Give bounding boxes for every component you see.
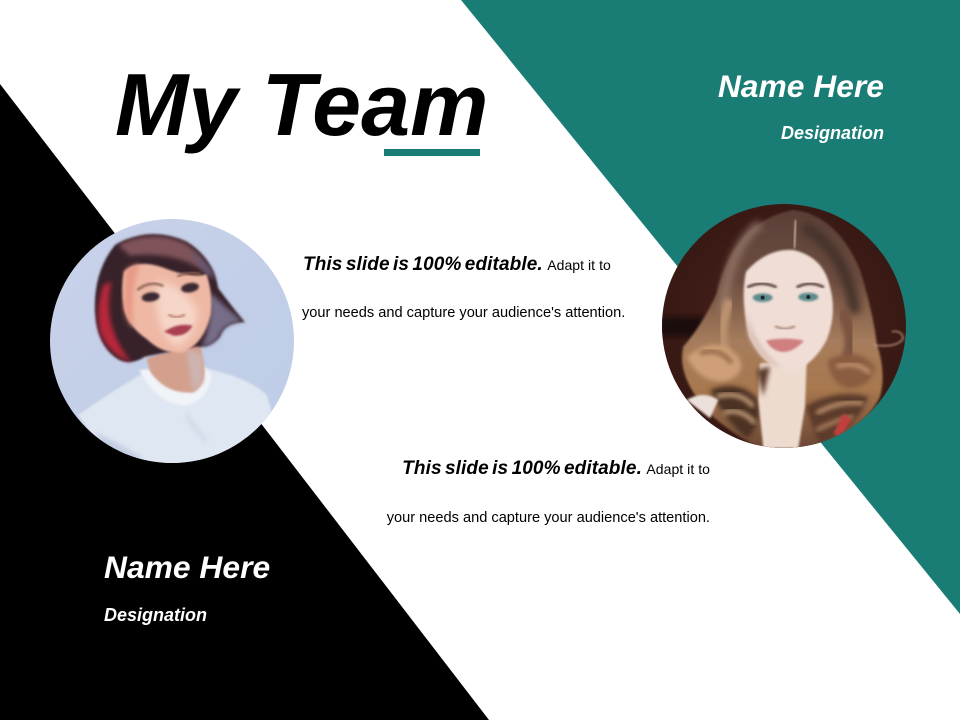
nose shadow — [775, 326, 795, 329]
red dress — [833, 413, 852, 437]
hair parting — [794, 220, 796, 248]
curls left — [687, 345, 741, 382]
lips — [164, 325, 193, 336]
second message lead line: This slide is 100% editable. Adapt it to — [402, 458, 710, 479]
hair back — [95, 234, 245, 362]
neck — [147, 342, 204, 393]
team member: top right — [718, 68, 884, 143]
name: Name Here — [718, 68, 884, 104]
first message lead line: This slide is 100% editable. Adapt it to — [303, 254, 611, 275]
second message second line: your needs and capture your audience's attention. — [387, 510, 710, 526]
face — [122, 264, 211, 353]
nose shadow — [168, 314, 185, 317]
face — [744, 250, 833, 371]
side strands — [723, 223, 760, 313]
designation: Designation — [781, 123, 884, 143]
portrait: woman with short hair — [50, 219, 294, 463]
title underline accent — [384, 149, 480, 156]
grey hair side — [202, 292, 243, 347]
hair mass — [682, 210, 883, 448]
top hair highlight — [118, 236, 215, 280]
eyes — [753, 293, 773, 302]
red hair highlight — [98, 282, 132, 362]
first message second line: your needs and capture your audience's attention. — [302, 305, 625, 321]
shirt — [78, 368, 272, 465]
eyes — [141, 291, 160, 303]
name: Name Here — [104, 549, 270, 585]
curls right — [828, 354, 875, 388]
text block: first message — [302, 254, 625, 321]
lips — [766, 339, 804, 352]
brows — [747, 284, 777, 287]
shoulder and chest — [687, 395, 718, 418]
text block: second message — [386, 458, 710, 526]
designation: Designation — [104, 605, 207, 625]
portrait: woman with long wavy hair — [662, 204, 906, 448]
title: My Team — [115, 55, 488, 154]
team member: bottom left — [104, 549, 270, 625]
